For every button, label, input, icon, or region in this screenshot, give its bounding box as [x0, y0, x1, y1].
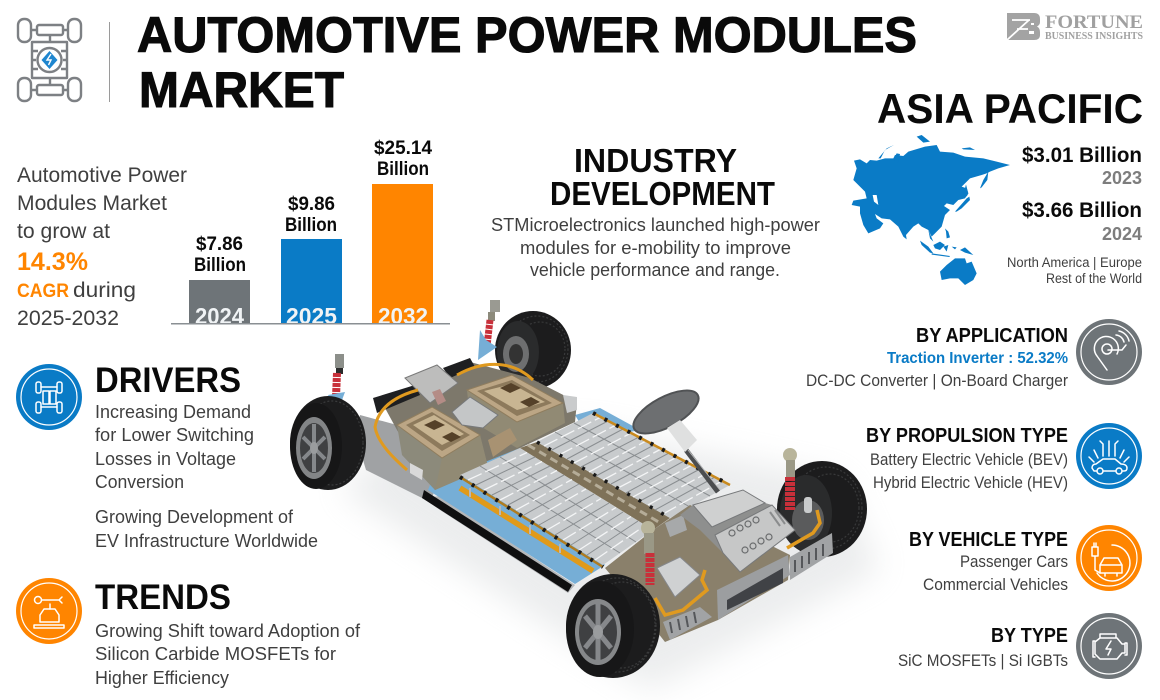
trends text: [95, 621, 361, 688]
segment: by propulsion type: BY PROPULSION TYPE: [866, 424, 1068, 447]
silver battery box front: [657, 557, 700, 597]
segment: by application: Traction Inverter : 52.32%: [887, 350, 1068, 367]
segment: by type: [898, 624, 1068, 670]
rear black modules: [373, 358, 475, 413]
title: [137, 7, 917, 118]
industry development: DEVELOPMENT: [550, 175, 775, 212]
engine bay base: [605, 505, 790, 642]
drivers panel: [16, 361, 318, 551]
suspension: front right: [783, 448, 812, 513]
segment: by propulsion type: Hybrid Electric Vehicle (HEV): [873, 473, 1068, 492]
icon: trends robotic arm and car: [16, 578, 82, 644]
growth statement: CAGR: [17, 281, 69, 302]
industry development: STMicroelectronics launched high-power: [491, 214, 820, 235]
icon: propulsion car with circuits: [1076, 423, 1142, 489]
growth statement: Modules Market: [17, 192, 167, 215]
drivers text: [95, 402, 318, 551]
drivers text: Increasing Demand: [95, 402, 251, 422]
front bumper block: [717, 555, 790, 620]
icon: vehicle type with charging plug: [1076, 525, 1142, 591]
growth statement: [17, 164, 187, 330]
segment: by vehicle type: [909, 528, 1068, 594]
drivers text: Losses in Voltage: [95, 449, 236, 469]
growth statement: to grow at: [17, 220, 110, 243]
drivers text: EV Infrastructure Worldwide: [95, 531, 318, 551]
logo: Fortune Business Insights: FORTUNE: [1045, 12, 1143, 33]
growth statement: 14.3%: [17, 248, 88, 276]
logo: Fortune Business Insights: [1007, 12, 1143, 42]
Asia Pacific statistics: North America | Europe: [1007, 255, 1142, 270]
rail between battery packs: [520, 442, 670, 530]
rear tan battery boxes: [373, 358, 577, 490]
left radiator: [663, 607, 712, 640]
trends panel: [16, 578, 361, 688]
header divider: [109, 22, 110, 102]
right radiator: [790, 533, 833, 580]
box right: [467, 375, 565, 448]
drivers text: for Lower Switching: [95, 425, 254, 445]
chassis lower plate: [423, 496, 575, 593]
bar chart: market size: 2024: [195, 303, 244, 329]
illustration: EV skateboard chassis: [290, 300, 880, 690]
industry development: INDUSTRY: [574, 142, 737, 179]
bar chart: market size: 2032: [378, 303, 428, 329]
trends text: Silicon Carbide MOSFETs for: [95, 644, 336, 664]
bar chart: market size: 2025: [286, 303, 337, 329]
trends heading: TRENDS: [95, 578, 231, 617]
steering wheel and column: [627, 382, 720, 492]
Asia Pacific statistics: 2023: [1102, 168, 1142, 188]
growth statement: Automotive Power: [17, 164, 187, 187]
Asia Pacific statistics: 2024: [1102, 224, 1142, 244]
blue tray: [428, 448, 605, 584]
battery pack: near: [460, 448, 653, 571]
title: MARKET: [139, 62, 344, 118]
segment: by vehicle type: BY VEHICLE TYPE: [909, 528, 1068, 551]
drivers text: Growing Development of: [95, 507, 294, 527]
machinery base under rear boxes: [385, 362, 577, 490]
segment: by propulsion type: Battery Electric Vehicle (BEV): [870, 450, 1068, 469]
segment: by type: SiC MOSFETs | Si IGBTs: [898, 652, 1068, 670]
front motor unit: [665, 490, 795, 572]
bar chart: market size: $7.86: [196, 234, 243, 255]
growth statement: during: [73, 279, 136, 302]
segment: by vehicle type: Passenger Cars: [960, 552, 1068, 571]
bar chart: market size: Billion: [377, 159, 429, 180]
bar chart: market size: $25.14: [374, 138, 432, 159]
Asia Pacific statistics: $3.01 Billion: [1022, 144, 1142, 167]
bar chart: market size: [171, 138, 450, 329]
title: AUTOMOTIVE POWER MODULES: [137, 7, 917, 63]
bar chart: market size: Billion: [194, 255, 246, 276]
Asia Pacific statistics: $3.66 Billion: [1022, 199, 1142, 222]
orange coolant pipes: [655, 510, 820, 615]
orange cables: [375, 364, 533, 470]
segment: by application: [806, 324, 1068, 390]
icon: engine with bolt: [1076, 613, 1142, 679]
heading: Asia Pacific: ASIA PACIFIC: [877, 85, 1143, 132]
bar chart: market size: Billion: [285, 215, 337, 236]
growth statement: 2025-2032: [17, 307, 119, 330]
wheel: far rear right: [495, 311, 571, 389]
silver motor between boxes: [452, 397, 498, 428]
segment: by application: BY APPLICATION: [916, 324, 1068, 347]
black side stripe: [422, 490, 572, 592]
front left wheel: [566, 574, 660, 678]
segment: by propulsion type: [866, 424, 1068, 492]
drivers heading: DRIVERS: [95, 361, 241, 400]
map: Asia Pacific: [852, 135, 1010, 285]
suspension: front left: [641, 521, 655, 585]
Asia Pacific statistics: [1007, 144, 1142, 286]
white cable clip: [410, 463, 423, 480]
segment: by vehicle type: Commercial Vehicles: [923, 575, 1068, 594]
segment: by application: DC-DC Converter | On-Board Charger: [806, 371, 1068, 390]
icon: drivers chassis: [16, 364, 82, 430]
trends text: Higher Efficiency: [95, 668, 229, 688]
bar chart: market size: $9.86: [288, 194, 335, 215]
rear left wheel: [290, 396, 366, 490]
suspension: rear right: [478, 300, 500, 360]
suspension: rear left: [328, 354, 345, 402]
box left: [397, 407, 488, 490]
header icon: chassis with power bolt: [18, 19, 81, 101]
icon: application location pin with car: [1076, 319, 1142, 385]
trends text: Growing Shift toward Adoption of: [95, 621, 361, 641]
ground shadow: [340, 420, 880, 690]
industry development: vehicle performance and range.: [530, 259, 780, 280]
battery pack: far: [537, 413, 730, 518]
Asia Pacific statistics: Rest of the World: [1046, 271, 1142, 286]
industry development: modules for e-mobility to improve: [520, 237, 791, 258]
logo: Fortune Business Insights: BUSINESS INSIGHTS: [1045, 31, 1143, 42]
segment: by type: BY TYPE: [991, 624, 1068, 647]
drivers text: Conversion: [95, 472, 184, 492]
chassis rear section: [357, 415, 435, 502]
wheel: far front right: [777, 461, 867, 557]
industry development: [491, 142, 820, 280]
